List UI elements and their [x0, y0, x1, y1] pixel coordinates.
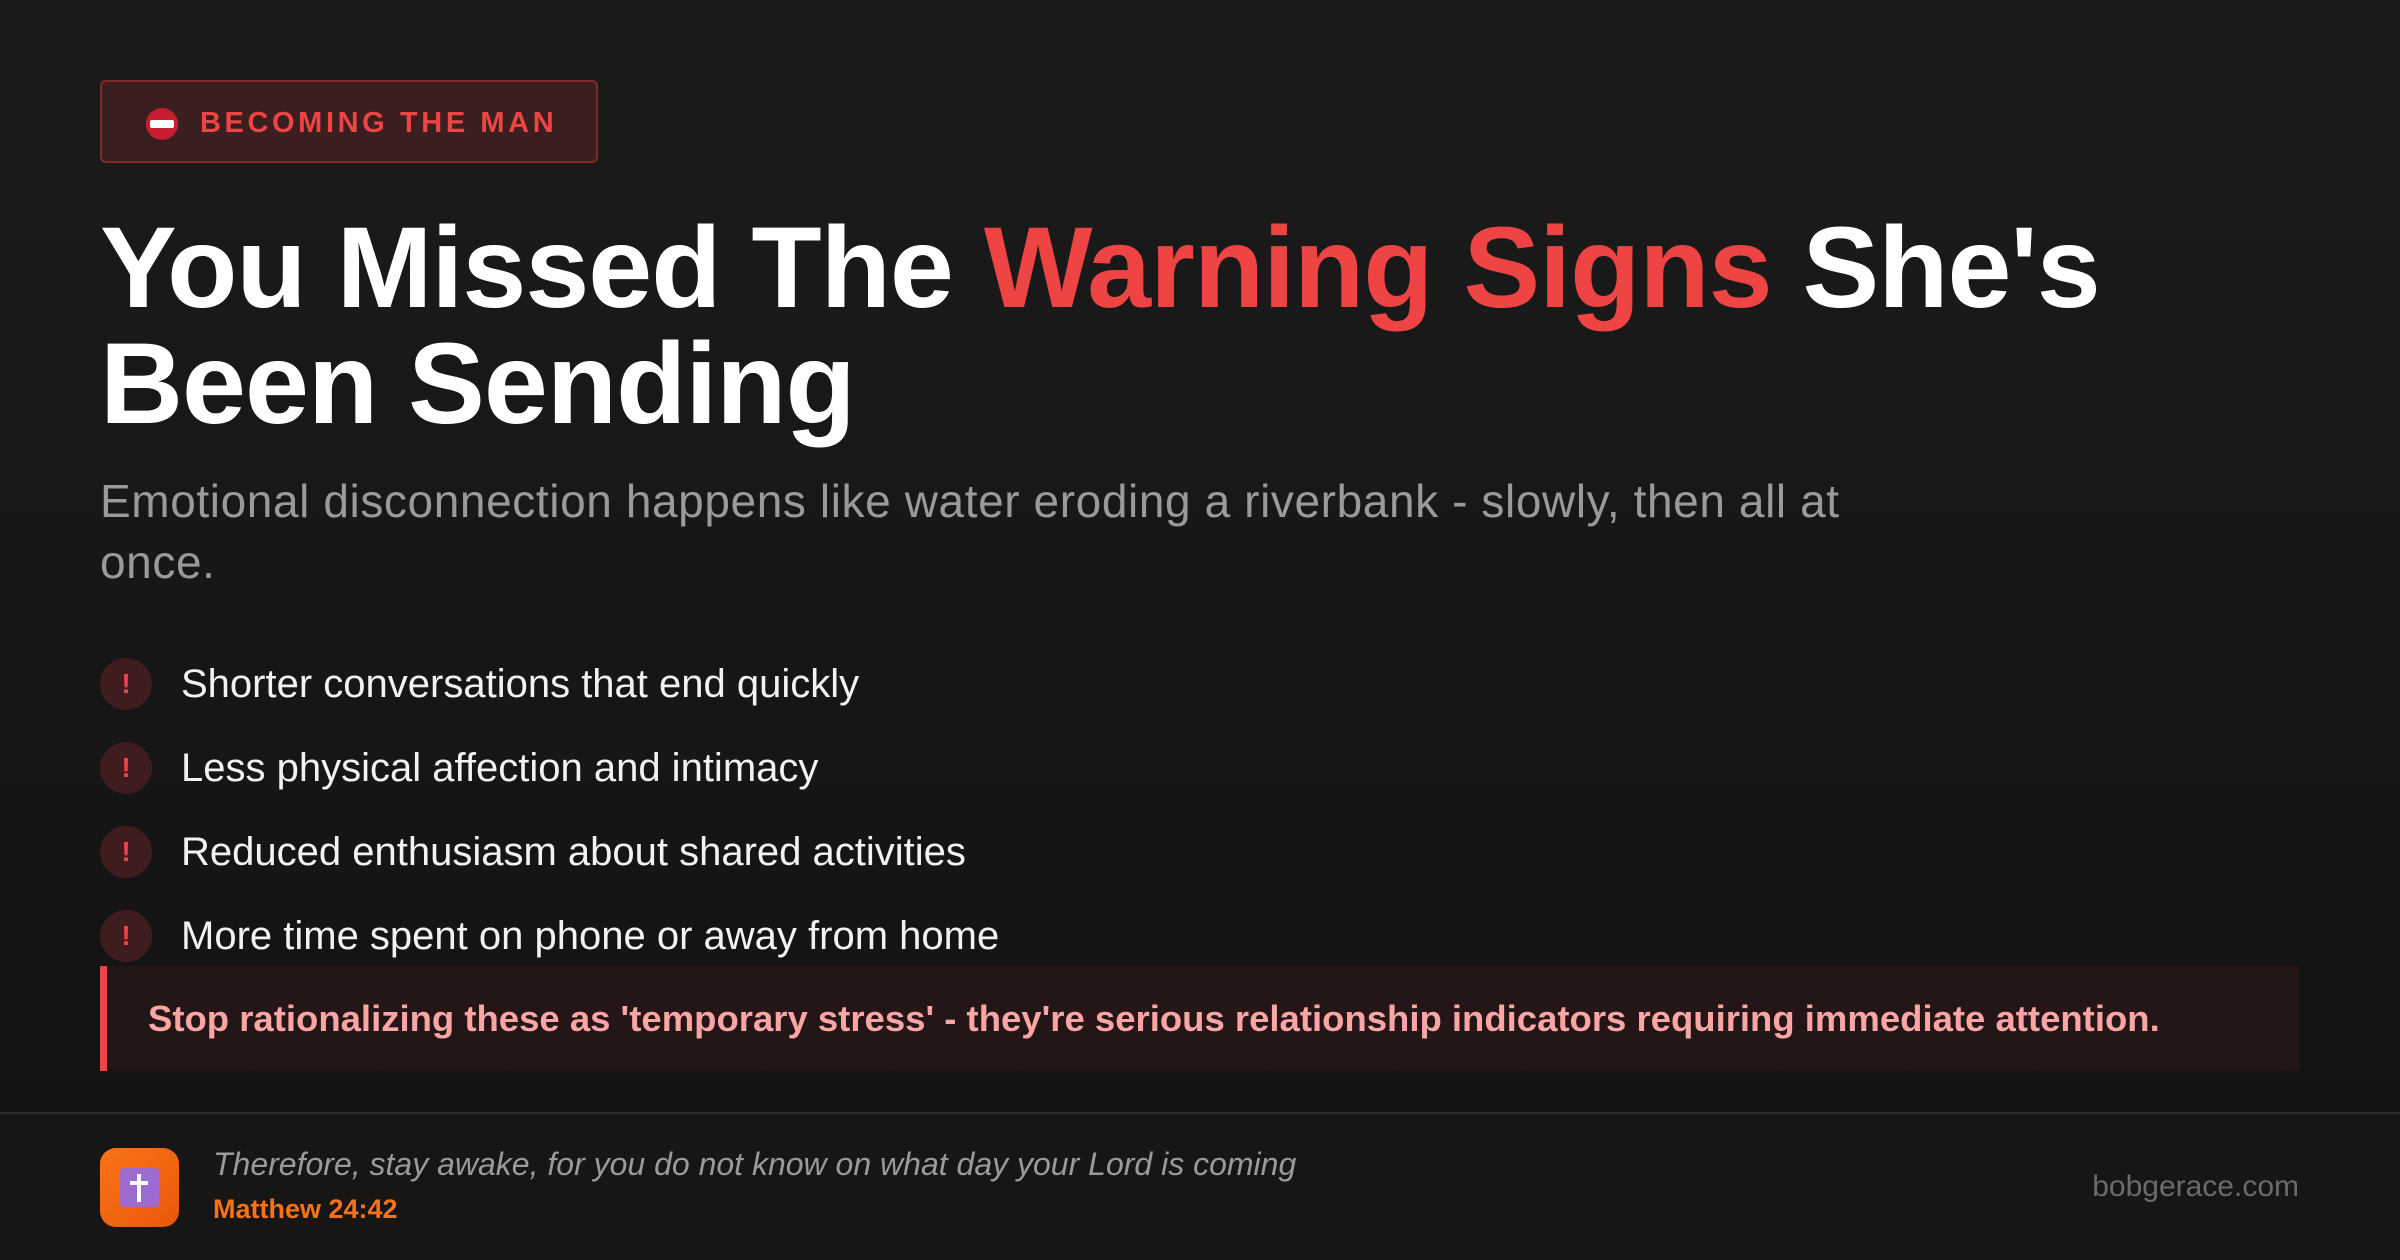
badge	[100, 80, 598, 163]
footer	[0, 1112, 2400, 1260]
item 1: Shorter conversations that end quickly	[181, 662, 859, 706]
icon: no entry	[146, 108, 178, 140]
site: bobgerace.com	[2092, 1170, 2299, 1203]
item 1: !	[121, 668, 131, 699]
verse reference: Matthew 24:42	[213, 1194, 398, 1224]
item 4: !	[121, 920, 131, 951]
item 2: Less physical affection and intimacy	[181, 746, 818, 790]
icon: bible cross	[100, 1148, 179, 1227]
subtitle: Emotional disconnection happens like water eroding a riverbank - slowly, then all at	[100, 475, 1840, 527]
item 4: More time spent on phone or away from home	[181, 914, 999, 958]
badge: BECOMING THE MAN	[200, 107, 557, 139]
item 2: !	[121, 752, 131, 783]
warning list	[100, 658, 999, 962]
quote: Therefore, stay awake, for you do not know on what day your Lord is coming	[213, 1146, 1296, 1182]
subtitle: once.	[100, 536, 216, 588]
item 3: !	[121, 836, 131, 867]
item 3: Reduced enthusiasm about shared activities	[181, 830, 966, 874]
title: You Missed The Warning Signs She's Been Sending	[100, 204, 2100, 448]
callout	[100, 966, 2299, 1071]
subtitle	[100, 475, 1840, 588]
callout: Stop rationalizing these as 'temporary stress' - they're serious relationship indicators requiring immediate attention.	[148, 998, 2160, 1038]
